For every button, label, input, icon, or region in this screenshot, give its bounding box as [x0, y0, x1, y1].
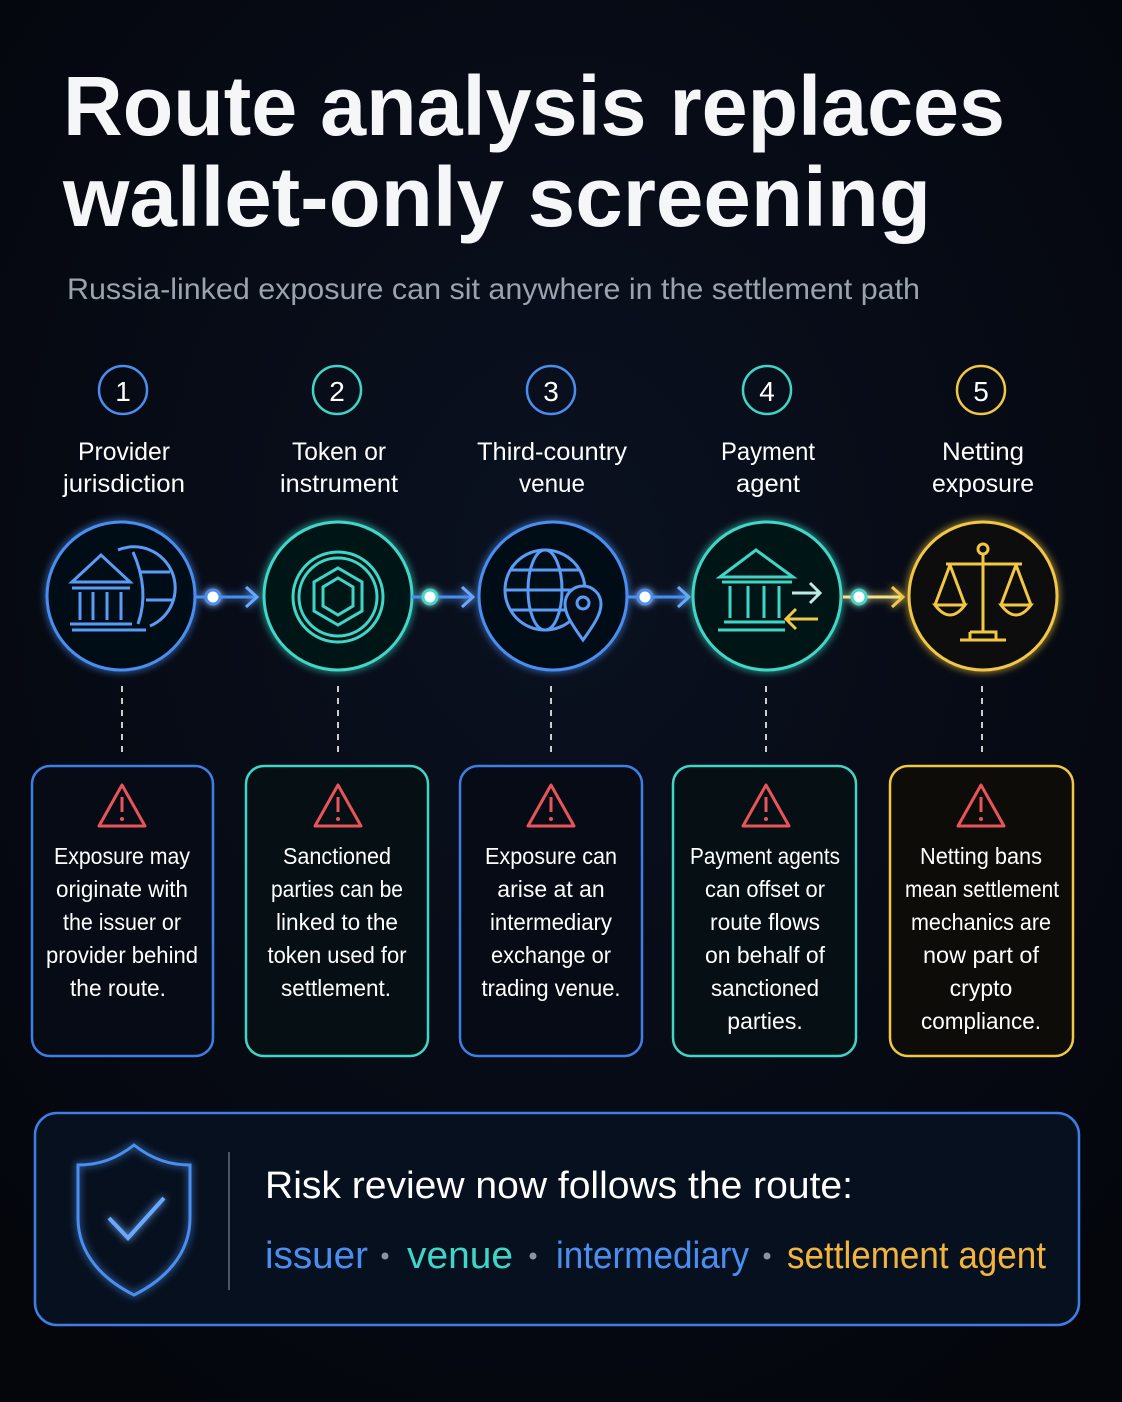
step 4: 4 — [759, 376, 775, 407]
card 5: Netting bans — [920, 843, 1042, 869]
arrow 4 — [843, 587, 903, 607]
card 5: mechanics are — [911, 909, 1051, 935]
step 2: 2 — [329, 376, 345, 407]
step 5: Netting — [942, 438, 1024, 466]
step 1 — [47, 366, 195, 752]
card 1: the issuer or — [63, 909, 181, 935]
card 2: linked to the — [276, 909, 398, 935]
card 3: arise at an — [497, 876, 605, 902]
subtitle: Russia-linked exposure can sit anywhere in the settlement path — [67, 273, 920, 306]
step 5: 5 — [973, 376, 989, 407]
bottom panel — [35, 1113, 1079, 1325]
card 4: sanctioned — [711, 975, 819, 1001]
card 4: on behalf of — [705, 942, 826, 968]
card 5: now part of — [923, 942, 1040, 968]
card 4: parties. — [727, 1008, 803, 1034]
title: wallet-only screening — [62, 150, 931, 244]
arrow 2 — [412, 587, 473, 607]
arrow 3 — [628, 587, 689, 607]
route keywords — [265, 1235, 1046, 1277]
step 4: Payment — [721, 438, 815, 466]
card 5 — [890, 766, 1073, 1056]
step 3 — [477, 366, 628, 752]
route keywords: intermediary — [556, 1235, 749, 1277]
card 4: can offset or — [705, 876, 825, 902]
card 3: Exposure can — [485, 843, 617, 869]
route keywords: issuer — [265, 1235, 368, 1277]
card 5: mean settlement — [905, 876, 1060, 902]
step 3: venue — [519, 470, 585, 498]
card 3 — [460, 766, 642, 1056]
card 1 — [32, 766, 213, 1056]
card 3: exchange or — [491, 942, 611, 968]
step 1: 1 — [115, 376, 131, 407]
card 1: originate with — [56, 876, 188, 902]
step 2: instrument — [280, 470, 398, 498]
step 1: Provider — [78, 438, 170, 466]
card 1: the route. — [70, 975, 166, 1001]
icon: shield — [78, 1145, 190, 1295]
card 5: compliance. — [921, 1008, 1041, 1034]
step 1: jurisdiction — [62, 470, 185, 498]
arrow 1 — [196, 587, 257, 607]
step 3: 3 — [543, 376, 559, 407]
panel heading: Risk review now follows the route: — [265, 1165, 853, 1207]
card 2: token used for — [268, 942, 407, 968]
route keywords: settlement agent — [787, 1235, 1046, 1277]
card 1: provider behind — [46, 942, 198, 968]
route keywords: venue — [407, 1235, 513, 1277]
card 4: Payment agents — [690, 843, 840, 869]
card 2: Sanctioned — [283, 843, 391, 869]
card 3: trading venue. — [482, 975, 620, 1001]
card 5: crypto — [950, 975, 1012, 1001]
step 4: agent — [736, 470, 800, 498]
step 2 — [264, 366, 412, 752]
card 2: parties can be — [271, 876, 403, 902]
title — [62, 59, 1005, 244]
card 3: intermediary — [490, 909, 612, 935]
step 2: Token or — [292, 438, 386, 466]
card 4: route flows — [710, 909, 820, 935]
step 5: exposure — [932, 470, 1034, 498]
step 5 — [909, 366, 1057, 752]
card 1: Exposure may — [54, 843, 190, 869]
card 2 — [246, 766, 428, 1056]
card 2: settlement. — [281, 975, 391, 1001]
title: Route analysis replaces — [63, 59, 1005, 153]
card 4 — [673, 766, 856, 1056]
step 4 — [693, 366, 841, 752]
step 3: Third-country — [477, 438, 628, 466]
